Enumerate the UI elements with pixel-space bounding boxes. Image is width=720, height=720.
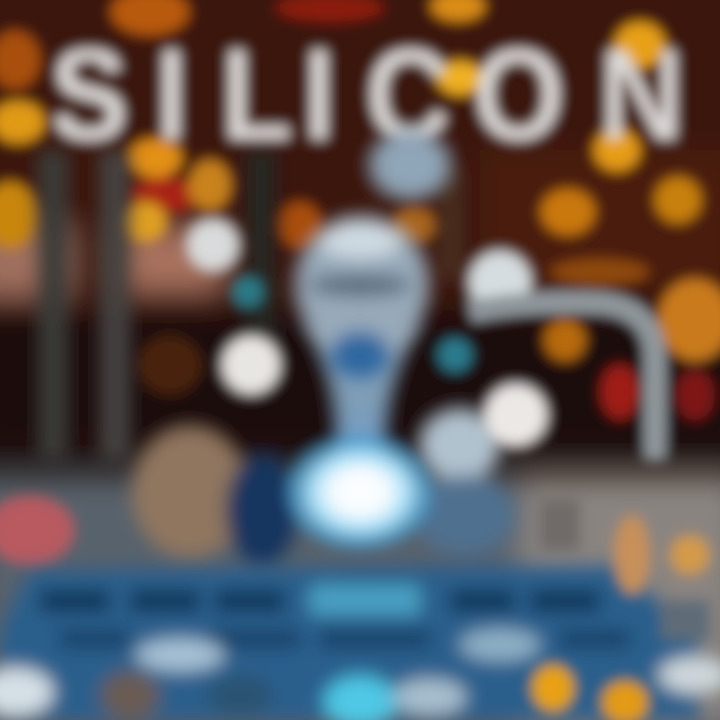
blue wafer surface bbox=[0, 565, 720, 720]
curved pipe bbox=[470, 302, 655, 460]
orange highlights on lower right bbox=[531, 500, 710, 720]
white orbs bbox=[187, 219, 548, 447]
title text: SILICON bbox=[50, 20, 684, 168]
crystal funnel neck bbox=[305, 131, 450, 475]
background: orange and red light spots bbox=[0, 0, 720, 564]
glove and sleeve forms bbox=[132, 409, 515, 566]
silicon crystal sphere bbox=[296, 217, 428, 379]
central glow bbox=[280, 430, 440, 554]
dark columns bbox=[38, 150, 462, 460]
